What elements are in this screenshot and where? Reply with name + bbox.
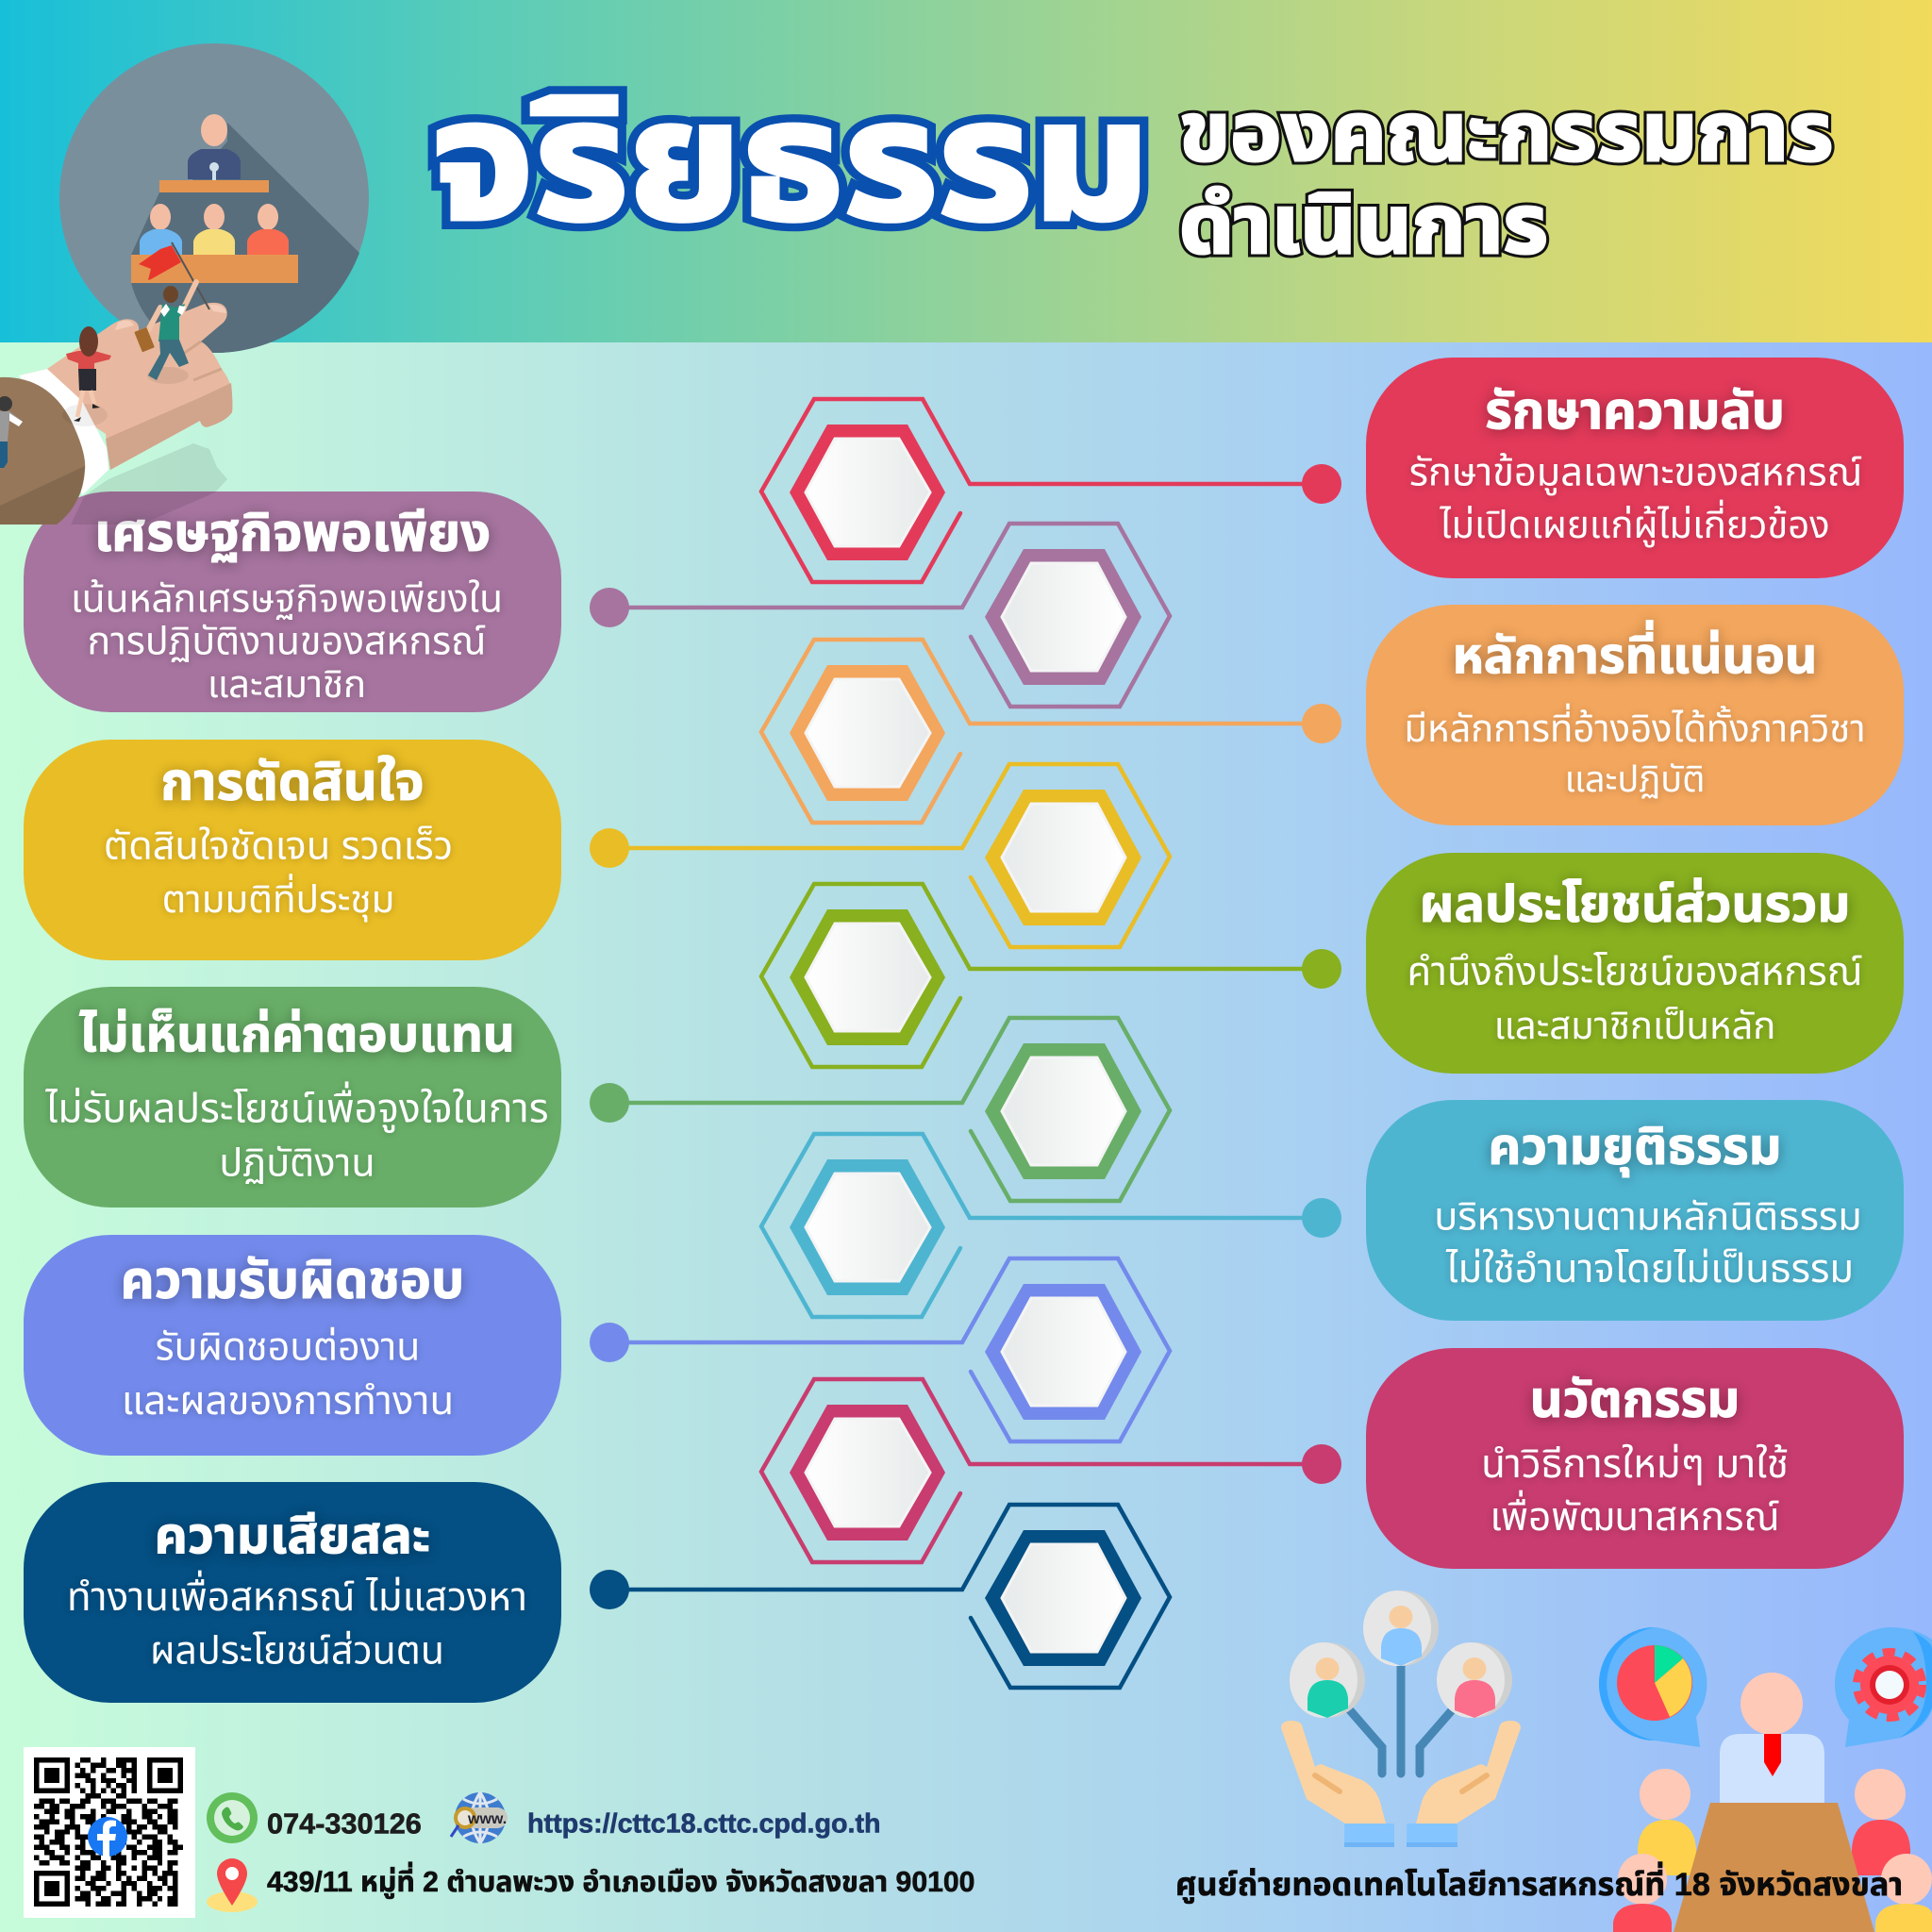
address: 439/11 หมู่ที่ 2 ตำบลพะวง อำเภอเมือง จังหวัดสงขลา 90100 — [267, 1867, 974, 1898]
icon: www globe — [449, 1791, 508, 1844]
pill body: นำวิธีการใหม่ๆ มาใช้ — [1481, 1441, 1789, 1486]
hexagon 1 red — [761, 399, 1341, 582]
pill body: มีหลักการที่อ้างอิงได้ทั้งภาควิชา — [1404, 708, 1866, 750]
hexagon 2 purple — [590, 524, 1170, 707]
climber woman — [62, 326, 111, 426]
pill body: ผลประโยชน์ส่วนตน — [150, 1628, 444, 1672]
pill: ผลประโยชน์ส่วนรวม — [1366, 853, 1904, 1074]
pill body: ตัดสินใจชัดเจน รวดเร็ว — [104, 824, 453, 867]
pill body: รับผิดชอบต่องาน — [156, 1324, 420, 1368]
hexagon 7 cyan — [761, 1134, 1341, 1317]
hexagon 3 orange — [761, 640, 1341, 823]
pill: หลักการที่แน่นอน — [1366, 605, 1904, 825]
pill body: และสมาชิก — [208, 664, 366, 706]
icon: facebook — [88, 1817, 127, 1857]
pill: ความยุติธรรม — [1366, 1100, 1904, 1321]
pill: เศรษฐกิจพอเพียง — [24, 491, 561, 712]
pill body: ไม่เปิดเผยแก่ผู้ไม่เกี่ยวข้อง — [1440, 505, 1830, 546]
pill body: ไม่รับผลประโยชน์เพื่อจูงใจในการ — [45, 1087, 549, 1132]
title: main heading: จริยธรรม — [432, 67, 1150, 255]
pill heading: ความยุติธรรม — [1489, 1119, 1781, 1175]
pill body: ทำงานเพื่อสหกรณ์ ไม่แสวงหา — [67, 1574, 527, 1619]
pill: นวัตกรรม — [1366, 1348, 1904, 1569]
pill body: การปฏิบัติงานของสหกรณ์ — [88, 619, 486, 662]
pill heading: หลักการที่แน่นอน — [1453, 628, 1817, 684]
title: sub heading: ดำเนินการ — [1179, 178, 1548, 271]
pill body: ไม่ใช้อำนาจโดยไม่เป็นธรรม — [1446, 1246, 1854, 1291]
climber with flag — [134, 242, 209, 384]
pill heading: ไม่เห็นแก่ค่าตอบแทน — [79, 1008, 515, 1063]
pill: ความเสียสละ — [24, 1482, 561, 1703]
climber man on sleeve — [0, 396, 23, 468]
footer organisation text: ศูนย์ถ่ายทอดเทคโนโลยีการสหกรณ์ที่ 18 จังหวัดสงขลา — [1175, 1867, 1903, 1903]
title: sub heading: ของคณะกรรมการ — [1179, 86, 1833, 178]
illustration: board meeting circle with hand and climbers — [0, 43, 369, 525]
pill heading: ผลประโยชน์ส่วนรวม — [1420, 876, 1850, 933]
hexagon 10 navy — [590, 1505, 1170, 1688]
pill body: และปฏิบัติ — [1565, 760, 1705, 800]
pill body: เน้นหลักเศรษฐกิจพอเพียงใน — [71, 577, 503, 621]
title: sub heading — [1177, 86, 1835, 271]
hexagon 9 crimson — [761, 1379, 1341, 1562]
meeting people with speech bubbles — [1599, 1627, 1932, 1932]
hand — [19, 303, 232, 470]
hexagon 5 green — [761, 884, 1341, 1067]
sleeve — [0, 377, 85, 525]
pill heading: เศรษฐกิจพอเพียง — [94, 503, 491, 562]
pill body: เพื่อพัฒนาสหกรณ์ — [1490, 1494, 1780, 1539]
pill: ไม่เห็นแก่ค่าตอบแทน — [24, 987, 561, 1208]
pill body: รักษาข้อมูลเฉพาะของสหกรณ์ — [1409, 449, 1862, 493]
pill: การตัดสินใจ — [24, 740, 561, 960]
header gradient band — [0, 0, 1932, 342]
pill heading: รักษาความลับ — [1485, 381, 1785, 440]
shirt cuff — [19, 369, 108, 495]
pill heading: การตัดสินใจ — [160, 752, 425, 811]
network hands — [1281, 1591, 1521, 1847]
phone number: 074-330126 — [267, 1807, 422, 1840]
pill body: และสมาชิกเป็นหลัก — [1494, 1006, 1775, 1047]
icon: www globe: www. — [467, 1811, 507, 1827]
pill body: ตามมติที่ประชุม — [162, 877, 394, 921]
pill body: และผลของการทำงาน — [122, 1378, 454, 1423]
hexagon 8 periwinkle — [590, 1258, 1170, 1441]
pill heading: ความเสียสละ — [155, 1507, 430, 1565]
hand shadow — [71, 443, 227, 525]
icon: map pin — [207, 1858, 258, 1912]
hexagon 6 leaf green — [590, 1018, 1170, 1201]
pill: ความรับผิดชอบ — [24, 1235, 561, 1456]
pill body: คำนึงถึงประโยชน์ของสหกรณ์ — [1407, 949, 1863, 993]
website url: https://cttc18.cttc.cpd.go.th — [527, 1809, 881, 1840]
pill heading: ความรับผิดชอบ — [121, 1250, 464, 1309]
pill body: บริหารงานตามหลักนิติธรรม — [1434, 1193, 1862, 1238]
icon: phone — [207, 1792, 258, 1843]
QR code panel — [24, 1747, 195, 1918]
meeting circle — [59, 43, 369, 353]
pill heading: นวัตกรรม — [1530, 1372, 1740, 1428]
pill body: ปฏิบัติงาน — [219, 1141, 375, 1184]
hexagon 4 yellow — [590, 764, 1170, 947]
pill: รักษาความลับ — [1366, 358, 1904, 578]
